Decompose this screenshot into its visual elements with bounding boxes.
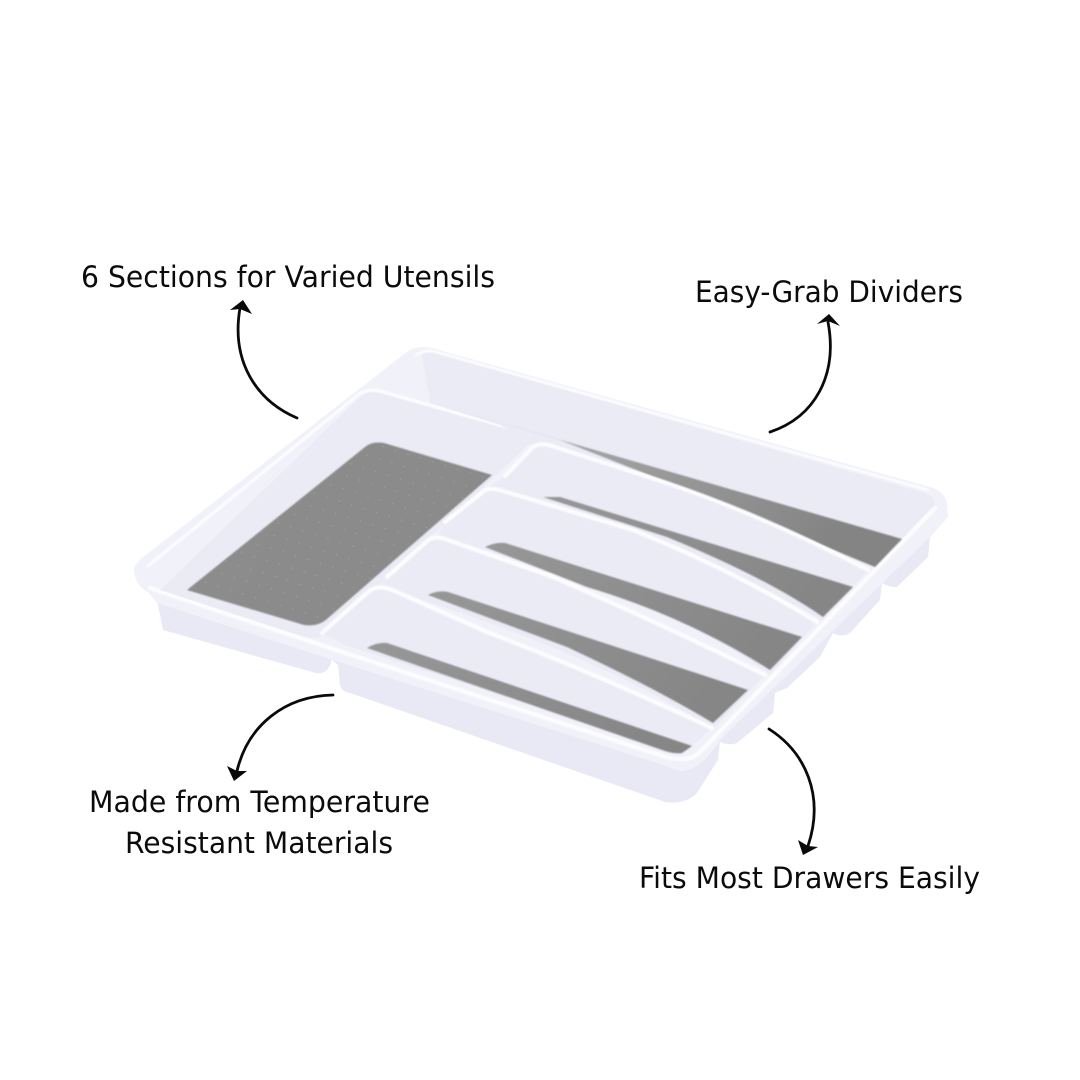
compartment: long back section — [416, 351, 934, 567]
compartment: large section — [148, 390, 530, 638]
arrow: to easy-grab dividers label — [770, 314, 840, 432]
compartment: second divider section — [380, 538, 765, 729]
label: easy-grab dividers: Easy-Grab Dividers — [695, 275, 963, 309]
label: temperature resistant materials — [89, 785, 430, 860]
arrow: to temperature resistant label — [227, 695, 333, 781]
arrow: to fits drawers label — [769, 729, 818, 855]
compartment: front section — [322, 588, 712, 754]
tray top rim — [134, 347, 948, 771]
label: temperature resistant materials: Resistant Materials — [125, 826, 393, 860]
label: temperature resistant materials: Made from Temperature — [89, 785, 430, 819]
rim front highlight — [150, 508, 935, 759]
product: cutlery tray — [134, 347, 948, 803]
label: 6 sections: 6 Sections for Varied Utensils — [81, 260, 495, 294]
compartment: fourth divider section — [487, 444, 868, 620]
arrow: to 6 sections label — [230, 300, 297, 418]
tray lower body — [157, 500, 948, 803]
compartment: third divider section — [437, 489, 817, 674]
label: fits most drawers: Fits Most Drawers Easily — [639, 861, 980, 895]
large section grey mat — [187, 442, 492, 625]
